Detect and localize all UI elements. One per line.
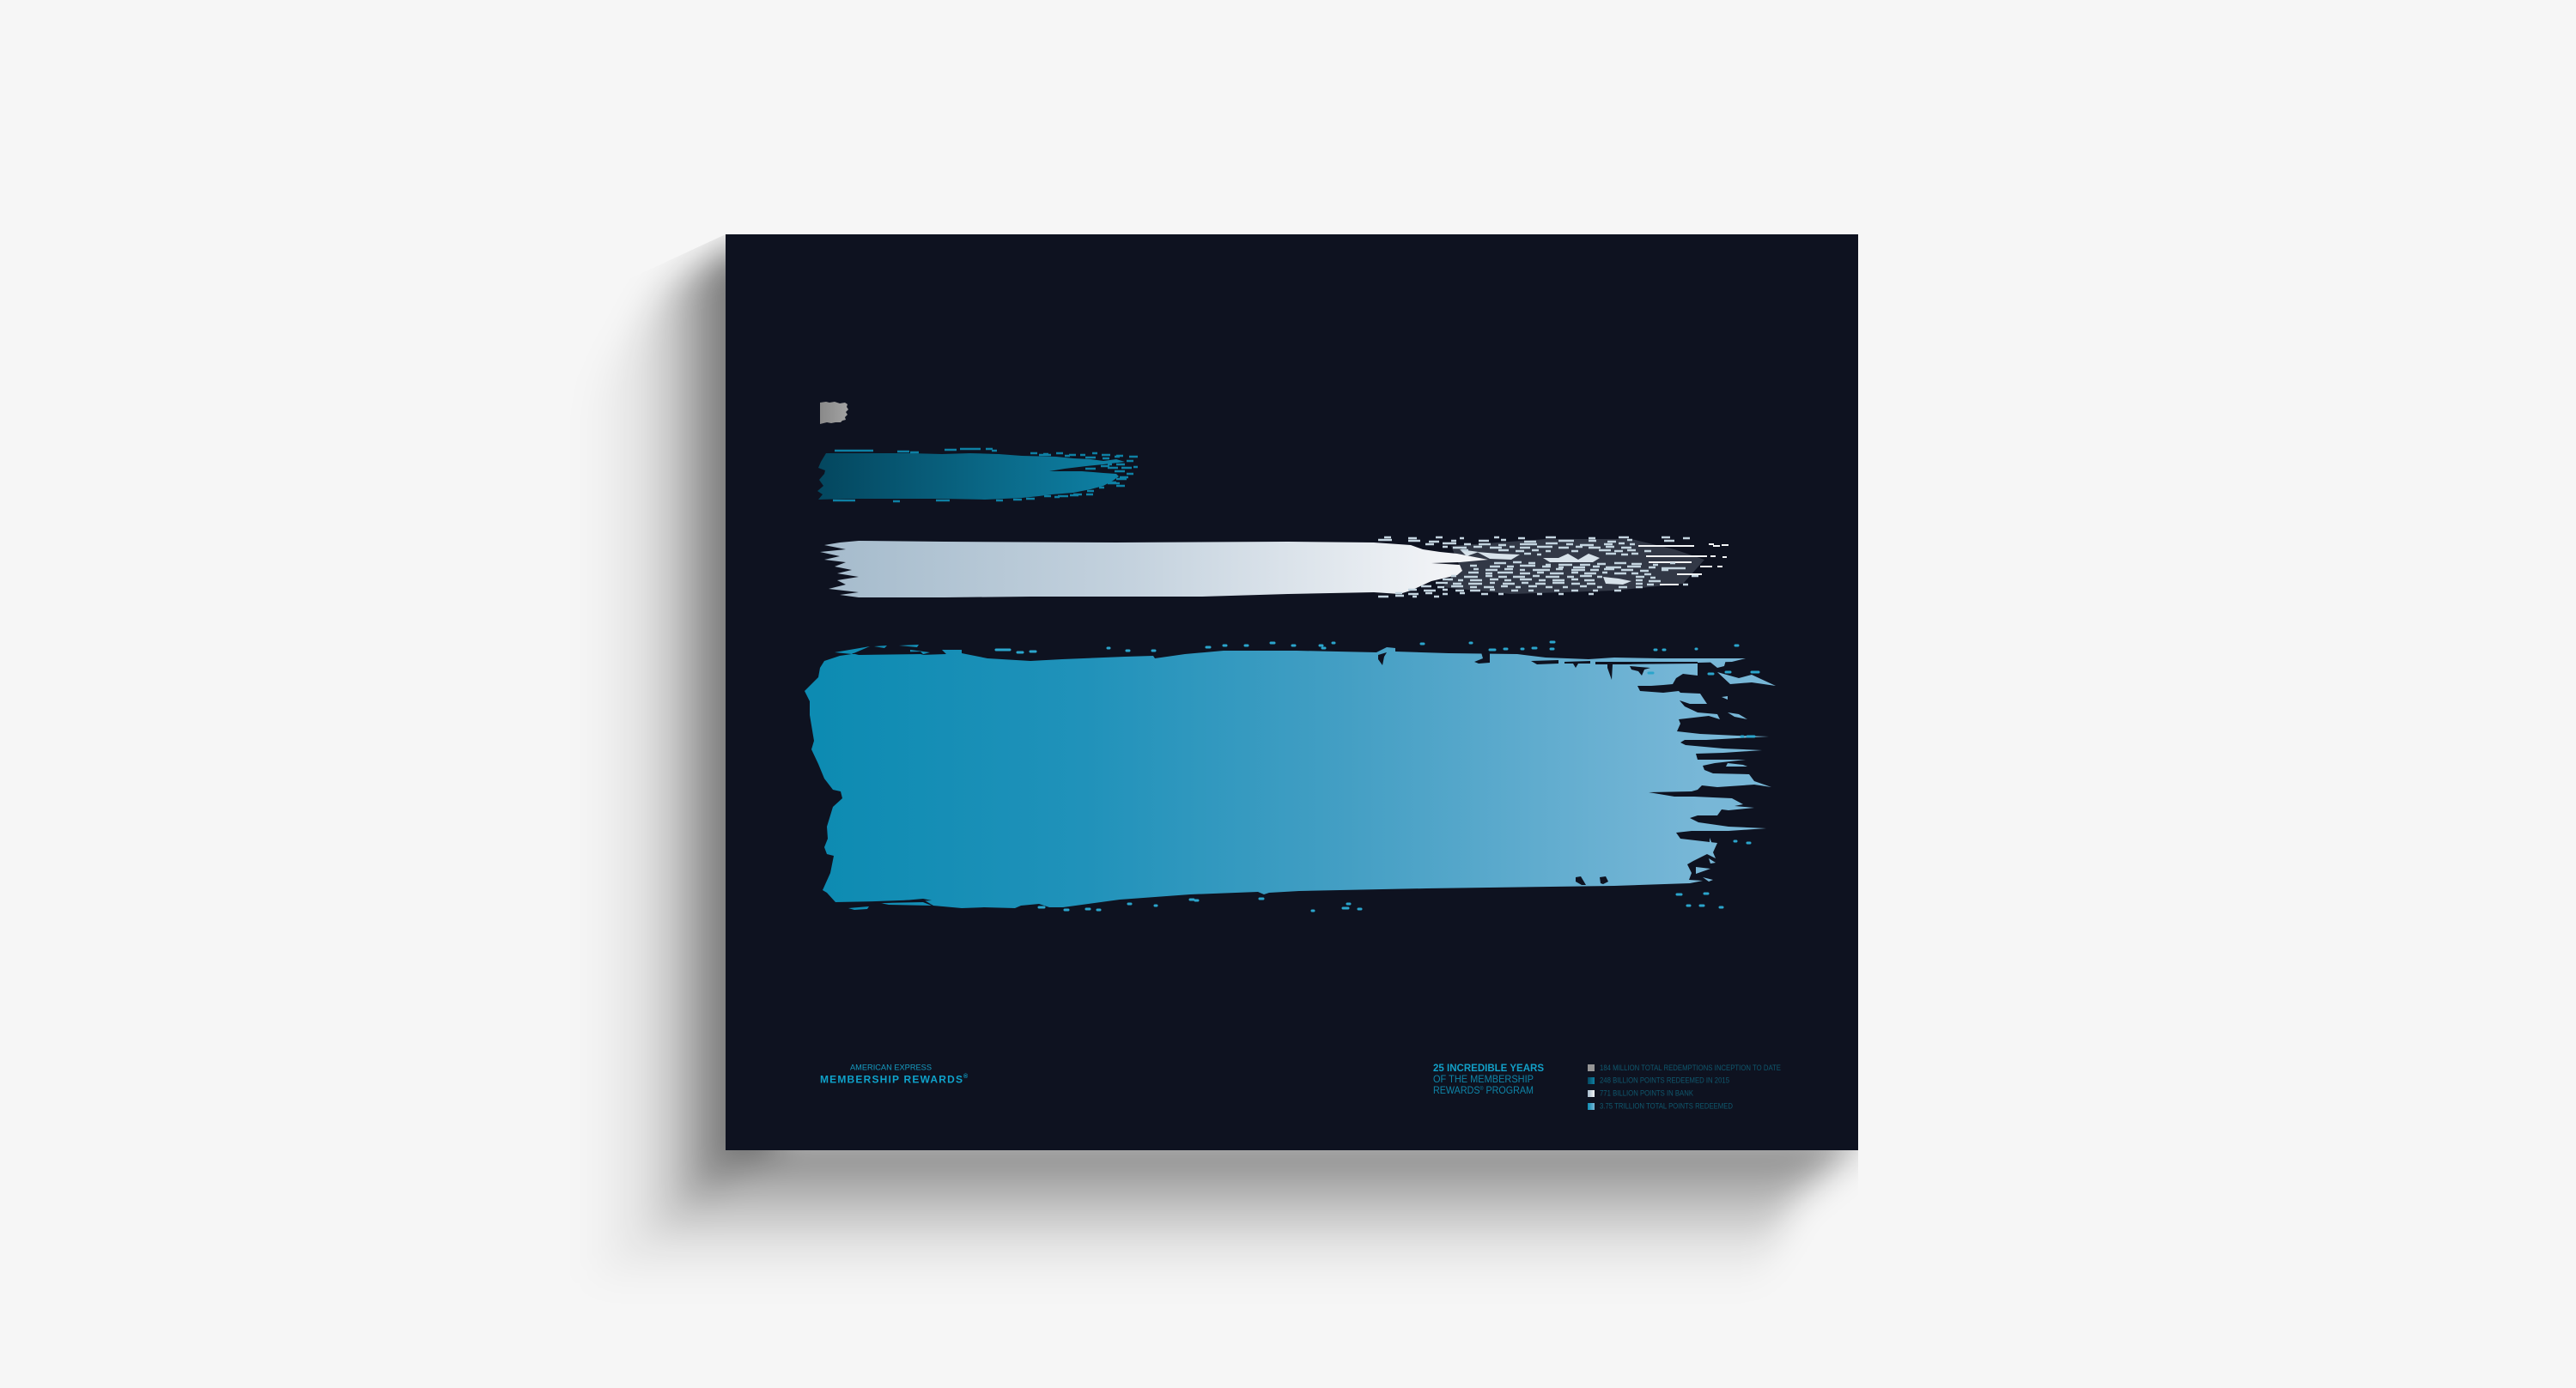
legend item: points redeemed in 2015: 248 BILLION POINTS REDEEMED IN 2015 — [1600, 1076, 1729, 1085]
legend — [1588, 1064, 1781, 1111]
poster drop shadow — [567, 245, 1868, 1305]
poster panel — [726, 234, 1858, 1150]
title: 25 incredible years: OF THE MEMBERSHIP — [1433, 1073, 1534, 1085]
title: 25 incredible years: ® — [1480, 1086, 1484, 1092]
brush bar: 184 million total redemptions (grey) — [820, 402, 848, 424]
logo: American Express Membership Rewards: MEMBERSHIP REWARDS — [820, 1073, 963, 1085]
logo: American Express Membership Rewards — [820, 1063, 969, 1085]
brush bar: 771 billion points in bank (white) — [820, 537, 1728, 597]
legend item: total points redeemed: 3.75 TRILLION TOTAL POINTS REDEEMED — [1600, 1102, 1733, 1111]
title: 25 incredible years: 25 INCREDIBLE YEARS — [1433, 1062, 1544, 1074]
legend item: points in bank: 771 BILLION POINTS IN BANK — [1600, 1088, 1693, 1099]
legend item: total redemptions: 184 MILLION TOTAL REDEMPTIONS INCEPTION TO DATE — [1600, 1064, 1781, 1073]
logo: American Express Membership Rewards: ® — [963, 1073, 969, 1080]
dark cracks — [848, 652, 1698, 906]
title: 25 incredible years: REWARDS — [1433, 1084, 1485, 1096]
title: 25 incredible years — [1433, 1062, 1544, 1096]
brush bar: 3.75 trillion total points redeemed (blue) — [805, 642, 1776, 911]
brush bar: 248 billion points redeemed in 2015 (teal) — [817, 449, 1138, 501]
blue fragments and streaks — [835, 645, 1776, 910]
speckle haze — [1443, 539, 1704, 594]
title: 25 incredible years: PROGRAM — [1484, 1084, 1534, 1096]
white fragments — [1460, 549, 1631, 585]
logo: American Express Membership Rewards: AMERICAN EXPRESS — [850, 1063, 932, 1073]
